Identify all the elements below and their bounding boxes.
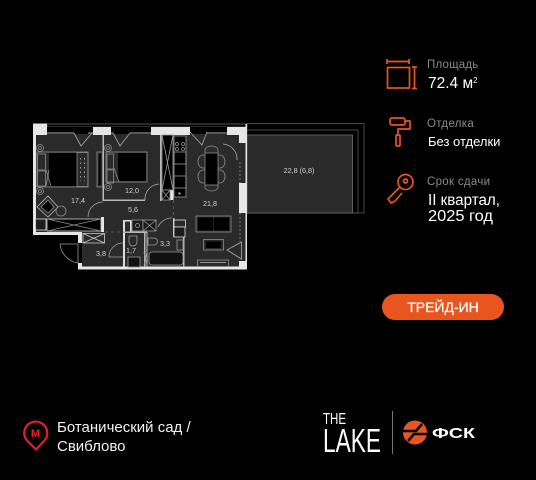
tv [198, 260, 228, 266]
icon: metro pin [24, 422, 47, 450]
door swing [74, 133, 92, 146]
room areas: 22,8 (6,8) [284, 166, 314, 175]
value: 72.4 м [428, 75, 473, 92]
bedroom 2 furniture [97, 133, 159, 200]
wardrobe [36, 219, 46, 230]
bed [37, 152, 88, 187]
button: trade-in: ТРЕЙД-ИН [407, 298, 479, 315]
room areas: 3,3 [160, 239, 170, 248]
room areas [71, 166, 314, 258]
logo: The Lake: LAKE [323, 422, 381, 459]
dining and living furniture [190, 132, 242, 266]
logo: The Lake: THE [323, 411, 346, 428]
station names: Свиблово [57, 438, 126, 455]
value: 2 [473, 76, 478, 85]
balcony [247, 124, 364, 213]
entry door [60, 244, 78, 263]
label: Площадь [427, 59, 478, 71]
sofa [196, 216, 231, 232]
window strip [47, 124, 247, 133]
logo: FSK [403, 420, 476, 444]
label: Срок сдачи [427, 176, 490, 188]
interior partitions [102, 135, 184, 267]
dining table [205, 153, 218, 185]
walls [33, 124, 247, 270]
apartment floor [35, 134, 246, 267]
room areas: 17,4 [71, 196, 85, 205]
label: Отделка [427, 118, 474, 130]
logo divider [392, 411, 393, 454]
icon: FSK emblem [403, 420, 427, 444]
dashed openings [105, 200, 174, 232]
info: delivery: 2025 год [428, 208, 493, 225]
logo: The Lake [323, 411, 381, 459]
floor plan [33, 124, 364, 270]
button: trade-in [382, 294, 504, 320]
value: II квартал, [428, 192, 500, 209]
kitchen [162, 135, 186, 200]
info: delivery [388, 174, 500, 225]
value: Без отделки [428, 134, 500, 149]
room areas: 1,7 [126, 246, 136, 255]
icon: paint roller [390, 118, 410, 146]
icon: area plan [387, 59, 417, 88]
logo: FSK: ФСК [432, 425, 476, 442]
info: finish [390, 118, 500, 149]
icon: key [388, 174, 413, 203]
room areas: 21,8 [203, 199, 217, 208]
bathroom fixtures [83, 218, 186, 267]
doors [190, 132, 207, 145]
room areas: 12,0 [125, 186, 139, 195]
info: area [387, 59, 478, 92]
station names: Ботанический сад / [57, 419, 191, 436]
bedroom 1 furniture [36, 133, 103, 231]
armchair [37, 196, 58, 217]
coffee table [204, 240, 224, 250]
room areas: 3,8 [96, 249, 106, 258]
room areas: 5,6 [128, 205, 138, 214]
metro [24, 419, 191, 455]
icon: metro pin: М [31, 428, 40, 440]
